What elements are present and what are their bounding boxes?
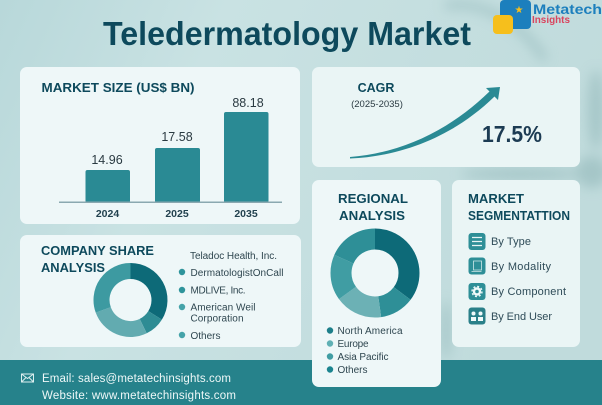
label: by end user: By End User <box>491 311 552 323</box>
icon: by end user <box>468 308 486 324</box>
heading: regional analysis: ANALYSIS <box>339 209 405 223</box>
CAGR period: (2025-2035) <box>351 99 403 110</box>
bar chart <box>59 96 282 220</box>
legend: regional <box>327 326 403 376</box>
label: by type: By Type <box>491 236 531 248</box>
legend: company share: Others <box>190 331 220 342</box>
label: by modality: By Modality <box>491 261 552 273</box>
panel: regional analysis <box>312 180 441 387</box>
heading: company share: COMPANY SHARE <box>41 244 154 258</box>
legend: company share: American Weil <box>190 302 256 314</box>
icon: by type <box>468 233 486 250</box>
heading: market segmentation: MARKET <box>468 192 524 206</box>
label: by component: By Component <box>491 286 566 298</box>
donut chart: regional <box>341 239 409 307</box>
heading: regional analysis: REGIONAL <box>338 192 408 206</box>
footer website: Website: www.metatechinsights.com <box>42 390 236 402</box>
logo: Insights <box>532 14 570 26</box>
legend: company share: MDLIVE, Inc. <box>190 286 246 296</box>
bar chart: 88.18 <box>232 96 264 110</box>
heading: market size: MARKET SIZE (US$ BN) <box>42 81 195 95</box>
icon: envelope <box>22 374 34 382</box>
logo <box>493 0 602 34</box>
legend: regional: Others <box>338 365 368 376</box>
icon: by component <box>468 283 486 300</box>
bar chart: 2035 <box>234 208 258 220</box>
panel: company share <box>20 235 301 347</box>
bar chart: 2024 <box>96 208 119 220</box>
icon: by modality <box>468 258 486 274</box>
title: Teledermatology Market <box>103 15 471 52</box>
legend: regional: North America <box>338 326 403 337</box>
panel: market segmentation <box>452 180 580 347</box>
legend: company share <box>179 251 284 342</box>
footer email: Email: sales@metatechinsights.com <box>42 373 231 385</box>
logo: Metatech <box>533 1 602 17</box>
heading: market segmentation: SEGMENTATTION <box>468 209 570 223</box>
arrow: growth curve <box>350 87 500 158</box>
legend: company share: Corporation <box>190 314 244 324</box>
bar chart: 17.58 <box>161 130 193 144</box>
legend: regional: Europe <box>338 339 369 350</box>
icon: logo star: ★ <box>515 5 524 16</box>
bar chart: 2025 <box>165 208 189 220</box>
footer band <box>0 360 602 405</box>
legend: company share: DermatologistOnCall <box>190 268 284 279</box>
legend: regional: Asia Pacific <box>338 352 388 363</box>
panel: market size <box>20 67 300 224</box>
CAGR value: 17.5% <box>482 121 542 147</box>
legend: company share: Teladoc Health, Inc. <box>190 251 277 262</box>
heading: company share: ANALYSIS <box>41 261 105 275</box>
heading: CAGR: CAGR <box>358 81 394 95</box>
bar chart: 14.96 <box>91 153 123 167</box>
donut chart: company share <box>102 271 159 329</box>
panel: CAGR <box>312 67 580 167</box>
